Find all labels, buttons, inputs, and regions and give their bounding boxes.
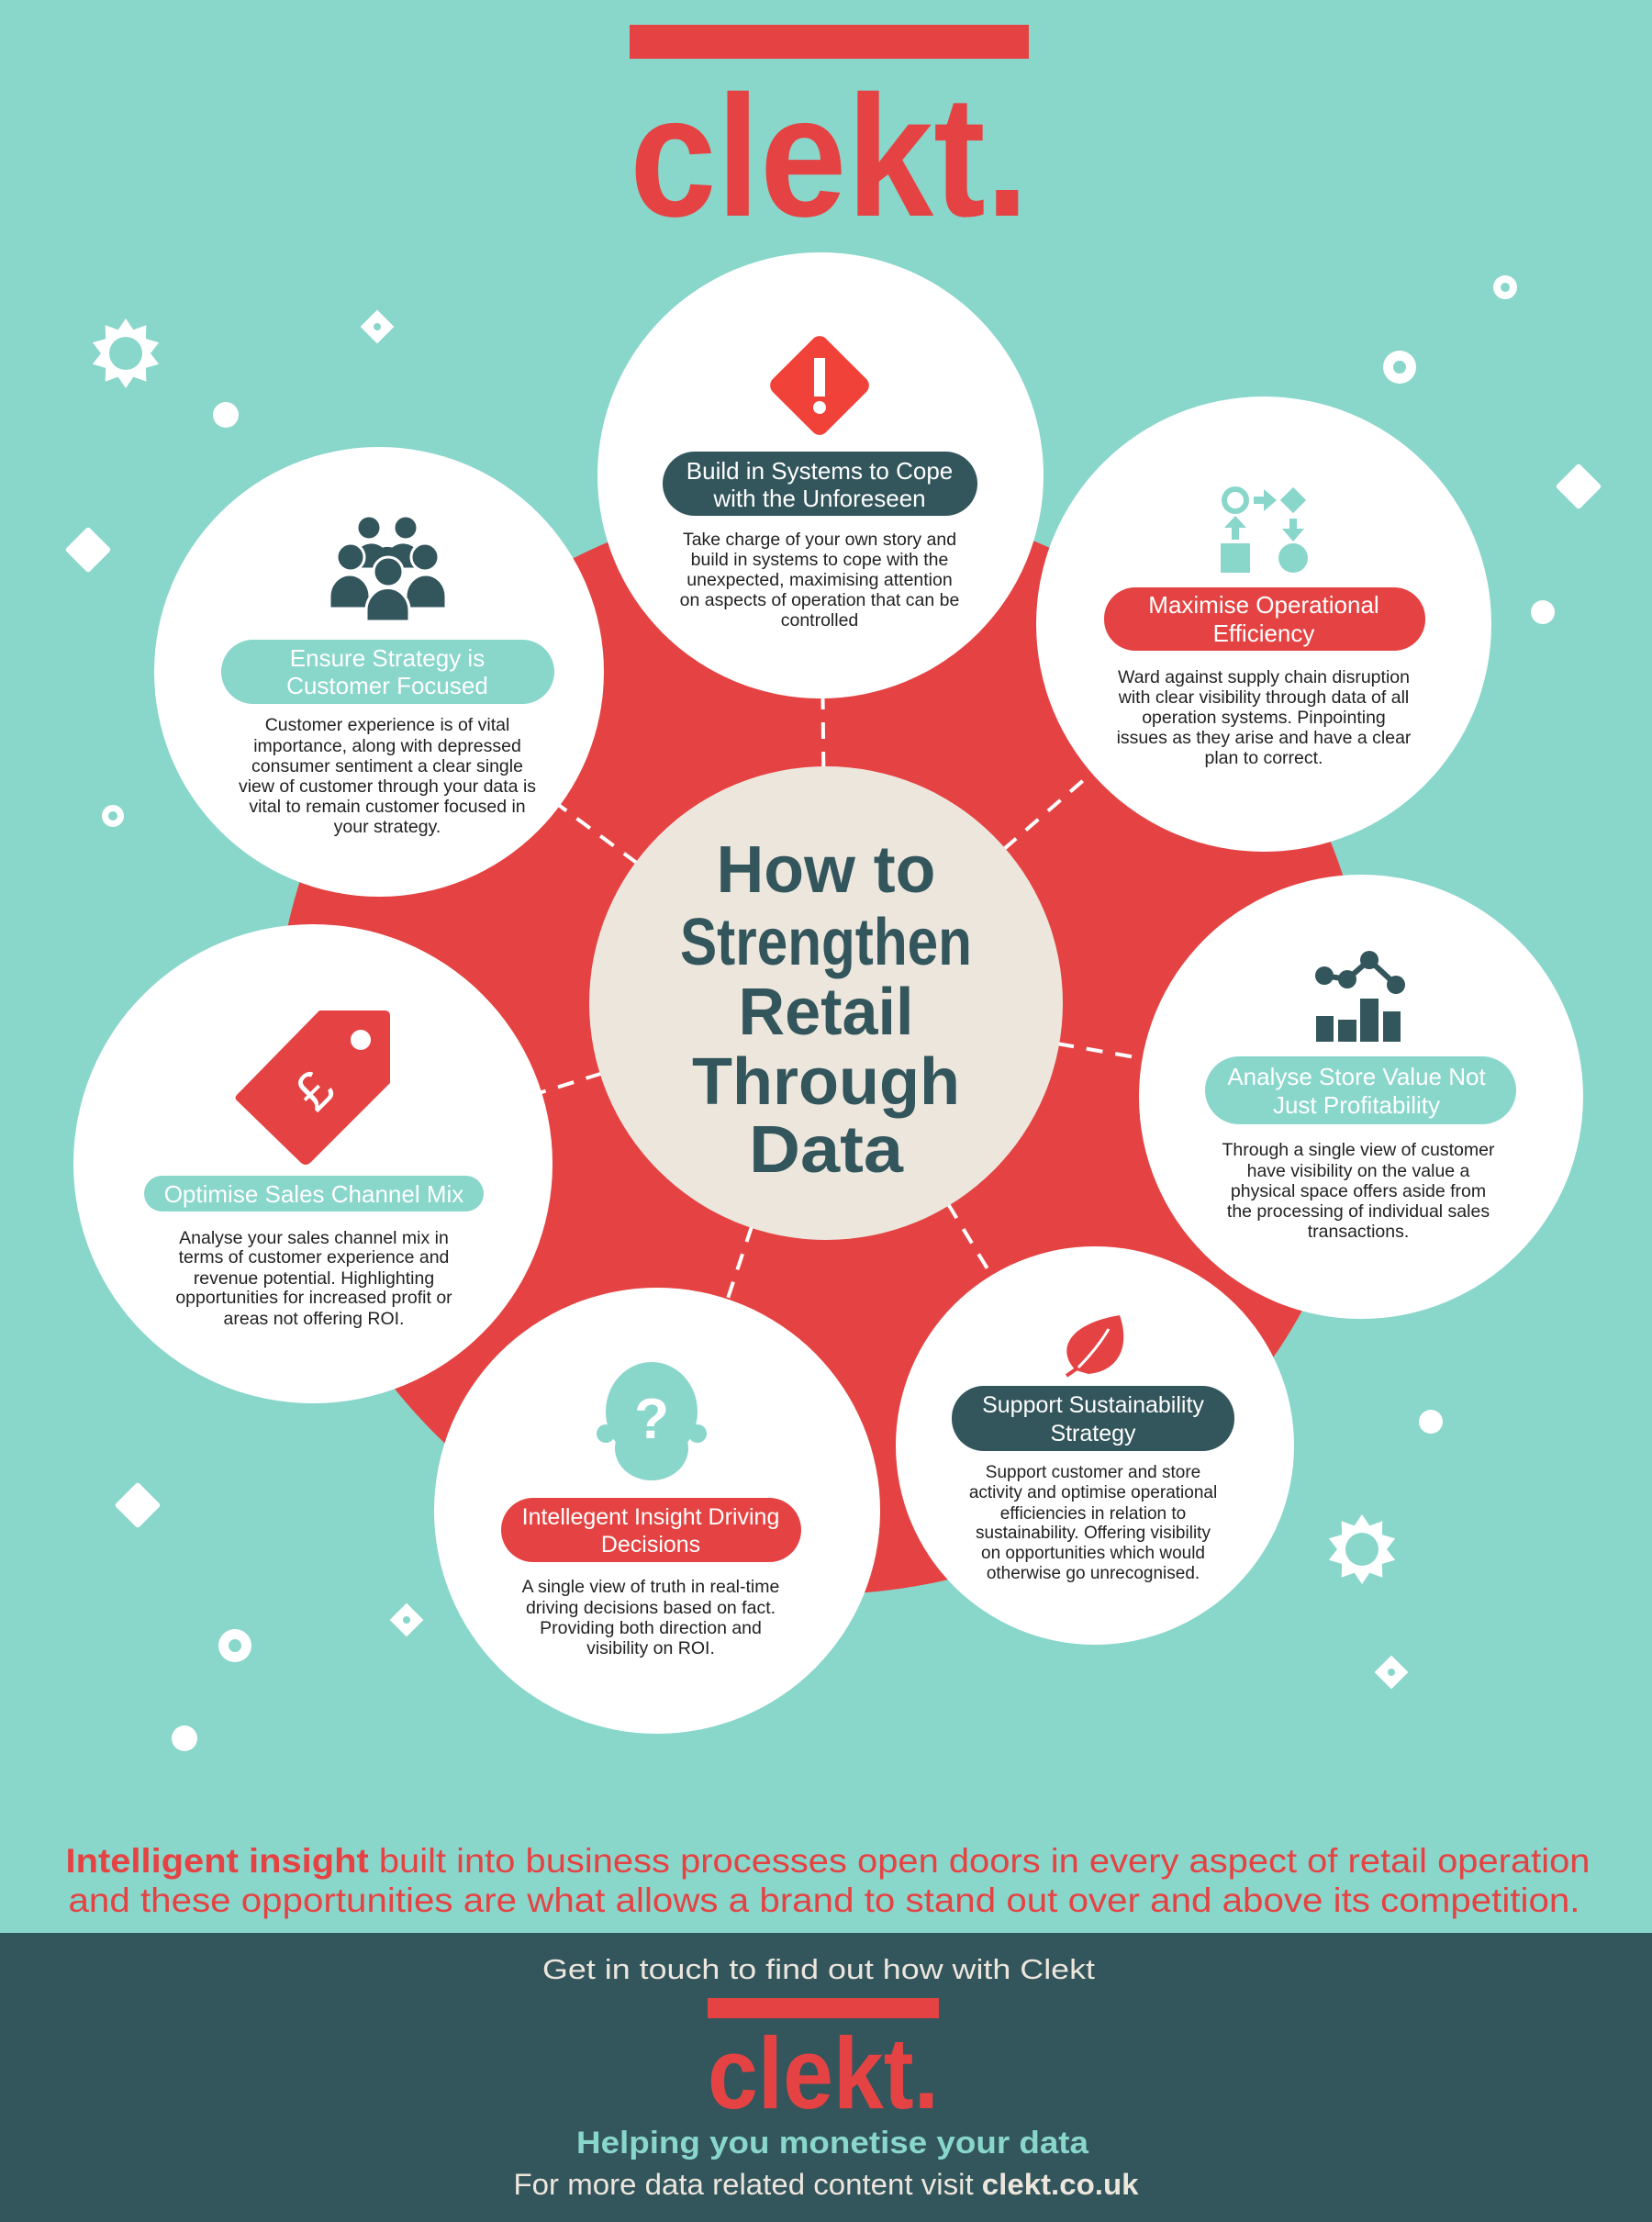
body text: controlled [781, 610, 858, 631]
body text: your strategy. [334, 817, 441, 837]
pill: title: Analyse Store Value Not [1227, 1063, 1486, 1090]
decorations: background shapes [65, 275, 1602, 1751]
footer: Get in touch to find out how with Clekt [542, 1953, 1095, 1985]
pill: title: Optimise Sales Channel Mix [164, 1180, 463, 1208]
pill: title [221, 640, 554, 704]
closing statement: and these opportunities are what allows a brand to stand out over and above its competition. [68, 1881, 1580, 1919]
icon: flow diagram [1221, 487, 1308, 573]
body text [175, 1228, 452, 1329]
body text: opportunities for increased profit or [175, 1288, 452, 1308]
panel: operational efficiency [1036, 396, 1491, 852]
pill: title [501, 1498, 801, 1562]
pill: title: Build in Systems to Cope [686, 457, 953, 485]
body text: with clear visibility through data of all [1118, 687, 1409, 708]
pill: title: Decisions [601, 1532, 700, 1558]
panel: customer focused [154, 447, 604, 897]
footer [0, 1933, 1652, 2222]
body text: Customer experience is of vital [265, 715, 509, 735]
logo: footer: clekt. [708, 2017, 939, 2130]
center circle: title: Strengthen [680, 906, 972, 979]
body text: Support customer and store [986, 1463, 1200, 1482]
icon: warning diamond [766, 332, 873, 439]
body text: transactions. [1308, 1222, 1409, 1242]
body text: Take charge of your own story and [683, 530, 956, 550]
body text: Through a single view of customer [1222, 1140, 1495, 1160]
closing statement: Intelligent insight built into business processes open doors in every aspect of retail operation [66, 1842, 1590, 1880]
body text: activity and optimise operational [969, 1483, 1217, 1502]
icon: price tag [235, 1011, 390, 1165]
body text: physical space offers aside from [1231, 1181, 1486, 1201]
panel: intelligent insight [434, 1288, 880, 1734]
body text: A single view of truth in real-time [522, 1577, 779, 1597]
body text: importance, along with depressed [253, 736, 521, 756]
body text: have visibility on the value a [1247, 1161, 1470, 1181]
pill: title [952, 1386, 1234, 1451]
body text: Providing both direction and [540, 1618, 762, 1638]
body text: driving decisions based on fact. [526, 1598, 776, 1618]
body text: terms of customer experience and [179, 1247, 449, 1267]
pill: title: Maximise Operational [1148, 591, 1379, 619]
body text: on opportunities which would [981, 1544, 1205, 1563]
body text: on aspects of operation that can be [680, 590, 959, 610]
pill: title: Just Profitability [1273, 1091, 1440, 1119]
center circle: title: How to [716, 833, 936, 907]
icon: leaf [1066, 1315, 1123, 1377]
body text [1117, 667, 1412, 768]
body text: visibility on ROI. [586, 1638, 715, 1658]
body text: the processing of individual sales [1227, 1201, 1490, 1222]
body text [680, 530, 959, 631]
closing statement [66, 1842, 1590, 1919]
pill: title: Intellegent Insight Driving [522, 1504, 779, 1530]
body text: unexpected, maximising attention [686, 570, 953, 590]
footer: Helping you monetise your data [576, 2126, 1089, 2161]
icon: price tag: £ [283, 1059, 346, 1122]
body text: revenue potential. Highlighting [194, 1268, 434, 1289]
panel: sustainability [896, 1246, 1294, 1645]
body text: view of customer through your data is [239, 776, 536, 797]
icon: head with question mark: ? [634, 1388, 669, 1451]
pill: title [1104, 587, 1425, 651]
pill: title [1205, 1056, 1516, 1124]
center circle: title: Retail [738, 976, 914, 1049]
center circle: title: Data [749, 1113, 904, 1187]
body text: otherwise go unrecognised. [987, 1564, 1200, 1583]
body text: Ward against supply chain disruption [1118, 667, 1410, 687]
body text [1222, 1140, 1495, 1242]
body text: plan to correct. [1205, 748, 1323, 768]
center circle: title: Through [692, 1045, 960, 1119]
pill: title: Efficiency [1213, 620, 1314, 647]
icon: chart [1315, 951, 1405, 1042]
dashed connectors [313, 475, 1361, 1511]
big red circle [274, 498, 1370, 1594]
panel: sales channel [73, 924, 553, 1403]
icon: head with question mark [597, 1362, 707, 1480]
pill: title: with the Unforeseen [712, 485, 926, 512]
pill: title: Strategy [1050, 1421, 1136, 1446]
icon: people [329, 516, 446, 621]
body text: Analyse your sales channel mix in [179, 1228, 449, 1248]
panel: build in systems [597, 252, 1044, 698]
logo: top: clekt. [630, 60, 1029, 252]
panel: store value [1139, 875, 1583, 1319]
body text: consumer sentiment a clear single [251, 756, 523, 776]
footer: For more data related content visit clekt.co.uk [514, 2168, 1139, 2201]
body text: vital to remain customer focused in [249, 797, 526, 817]
body text: efficiencies in relation to [1000, 1504, 1186, 1524]
body text: areas not offering ROI. [224, 1309, 404, 1329]
pill: title [663, 452, 977, 516]
body text [969, 1463, 1217, 1583]
pill: title: Ensure Strategy is [290, 644, 485, 672]
body text: issues as they arise and have a clear [1117, 728, 1412, 748]
pill: title [144, 1176, 484, 1211]
body text: sustainability. Offering visibility [976, 1524, 1211, 1543]
body text: build in systems to cope with the [691, 550, 948, 570]
pill: title: Support Sustainability [982, 1392, 1204, 1418]
body text [239, 715, 536, 837]
body text [522, 1577, 779, 1658]
body text: operation systems. Pinpointing [1142, 708, 1386, 728]
pill: title: Customer Focused [286, 672, 488, 699]
center circle: title [589, 766, 1063, 1240]
